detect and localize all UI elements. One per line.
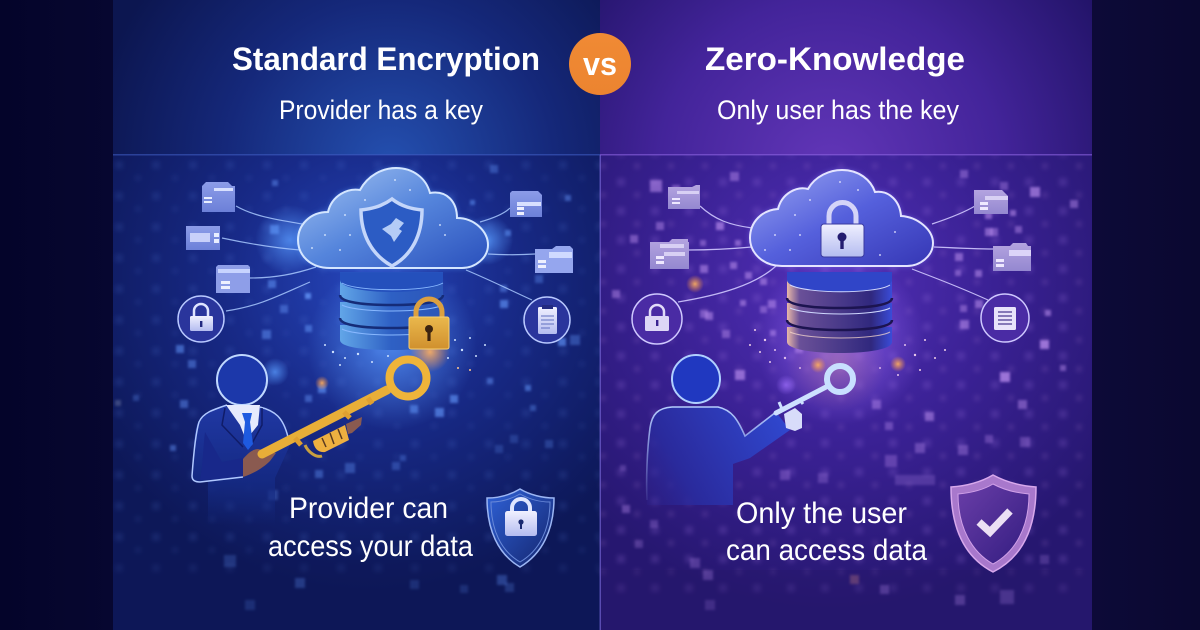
padlock in cloud bbox=[821, 202, 864, 257]
lock badge: left bbox=[178, 296, 224, 342]
glows: right bbox=[686, 255, 925, 425]
result text: left: Provider can bbox=[289, 492, 448, 525]
folder 2 bbox=[650, 239, 689, 269]
folder 1 bbox=[668, 185, 700, 209]
head bbox=[672, 355, 720, 403]
cloud sparkles bbox=[311, 179, 446, 251]
folder 1 bbox=[202, 182, 235, 212]
shield with lock bbox=[487, 489, 554, 567]
document badge: right bbox=[981, 294, 1029, 342]
shirt collar bbox=[226, 405, 260, 440]
folder 3 bbox=[974, 190, 1008, 214]
vs badge bbox=[569, 33, 631, 95]
result text: right: can access data bbox=[726, 534, 927, 567]
outline bbox=[647, 407, 776, 500]
database: right bbox=[787, 272, 892, 353]
lapels bbox=[222, 408, 262, 447]
head bbox=[217, 355, 267, 405]
subtitle: provider has a key: Provider has a key bbox=[279, 95, 483, 125]
person in suit bbox=[192, 355, 290, 525]
glows: left bbox=[255, 205, 513, 430]
result text: left bbox=[268, 492, 473, 563]
particles: left panel bbox=[115, 165, 580, 610]
folder 2 bbox=[186, 226, 220, 250]
lock badge: right bbox=[632, 294, 682, 344]
result text: right bbox=[726, 497, 927, 567]
cloud with shield: left bbox=[298, 168, 488, 268]
subtitle: only user has the key: Only user has the key bbox=[717, 95, 959, 125]
title: standard encryption: Standard Encryption bbox=[232, 41, 540, 77]
connector lines: right bbox=[678, 206, 994, 302]
sparkles: right bbox=[749, 329, 946, 376]
title: zero-knowledge: Zero-Knowledge bbox=[705, 41, 965, 77]
body and arm bbox=[647, 407, 790, 505]
golden padlock bbox=[409, 299, 449, 349]
result text: right: Only the user bbox=[736, 497, 907, 530]
database: left bbox=[340, 272, 443, 350]
connector lines: left bbox=[222, 206, 535, 311]
golden key bbox=[262, 360, 426, 456]
user silhouette bbox=[647, 355, 790, 505]
shield with checkmark bbox=[951, 475, 1036, 572]
suit outline bbox=[192, 405, 288, 482]
document badge: left bbox=[524, 297, 570, 343]
folder 5 bbox=[535, 246, 573, 273]
gripping hand bbox=[313, 425, 349, 452]
folder 4 bbox=[993, 243, 1031, 271]
header: right bbox=[600, 0, 1092, 156]
folder icons: left bbox=[186, 182, 573, 293]
sleeve cuff bbox=[305, 445, 322, 456]
left hand holding key bbox=[243, 449, 276, 477]
cloud sparkles bbox=[764, 181, 896, 256]
shield in cloud bbox=[361, 199, 422, 266]
header: left bbox=[113, 0, 600, 156]
tie bbox=[242, 413, 253, 450]
panel: standard encryption bbox=[113, 155, 600, 630]
folder 4 bbox=[510, 191, 542, 217]
user hand bbox=[784, 408, 802, 431]
vs badge: vs bbox=[583, 46, 617, 82]
sleeve bbox=[200, 432, 243, 480]
glowing key bbox=[776, 366, 853, 413]
result text: left: access your data bbox=[268, 530, 473, 563]
sparkles: left bbox=[324, 337, 486, 371]
folder 3 bbox=[216, 265, 250, 293]
suit torso bbox=[192, 405, 290, 525]
panel: zero-knowledge bbox=[600, 155, 1092, 630]
cloud with padlock: right bbox=[750, 170, 933, 266]
particles: right panel bbox=[612, 170, 1078, 610]
folder icons: right bbox=[650, 185, 1031, 271]
